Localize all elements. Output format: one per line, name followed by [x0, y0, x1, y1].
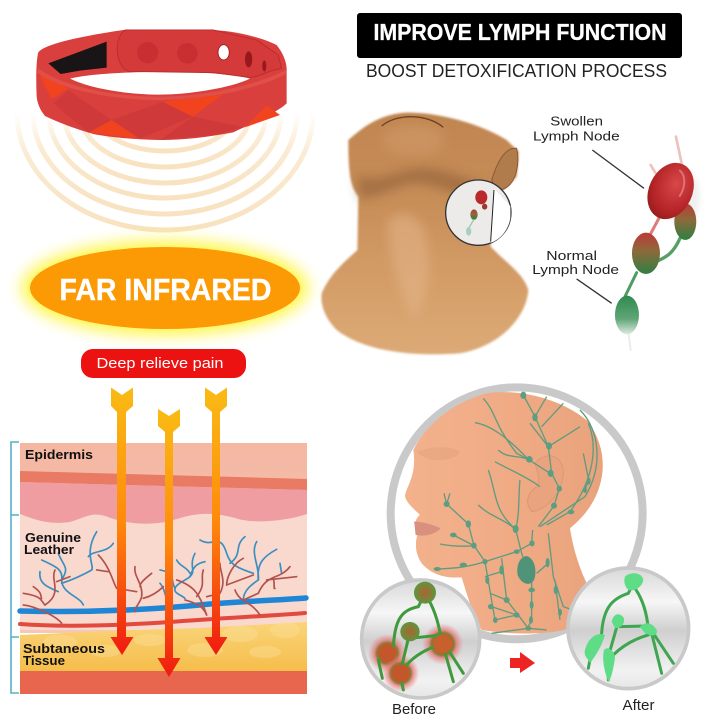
leader line swollen	[592, 150, 644, 188]
chin highlight	[382, 124, 445, 156]
grey ring	[391, 387, 643, 639]
soft shadow	[663, 168, 700, 225]
nodes	[379, 582, 452, 682]
label swollen: Lymph Node	[533, 128, 620, 143]
title banner: IMPROVE LYMPH FUNCTION	[374, 19, 666, 45]
after circle	[568, 568, 689, 689]
inflamed glow	[368, 623, 463, 692]
label subtaneous tissue	[23, 641, 105, 668]
lymph node diagram	[532, 113, 703, 350]
label after: After	[622, 697, 654, 714]
ear	[492, 148, 518, 189]
leader line normal	[577, 279, 612, 303]
front rim shading	[37, 68, 286, 100]
label subtaneous tissue: Tissue	[23, 653, 65, 668]
subtitle: BOOST DETOXIFICATION PROCESS	[366, 61, 667, 81]
chin crease	[382, 117, 443, 127]
label genuine leather: Leather	[24, 542, 74, 557]
blood vessels	[20, 532, 306, 626]
label normal	[532, 248, 619, 277]
magnifier circle	[446, 180, 511, 245]
after network	[588, 587, 673, 680]
jaw shadow	[357, 168, 488, 203]
infrared wave arcs	[17, 113, 313, 230]
arrow right	[204, 388, 228, 655]
bracelet	[36, 30, 287, 140]
pain relief pill	[81, 349, 246, 378]
skin cross-section	[11, 442, 307, 694]
lips	[414, 522, 441, 536]
bracket	[11, 442, 19, 693]
far infrared badge	[22, 241, 308, 335]
title banner	[357, 13, 682, 58]
nodes	[615, 155, 703, 334]
label normal: Normal	[546, 248, 597, 263]
strap with studs	[117, 30, 282, 77]
label genuine leather	[24, 530, 81, 557]
bracelet opening	[70, 72, 250, 95]
lymph nodes	[434, 392, 591, 631]
epidermis layers	[20, 443, 307, 633]
label epidermis: Epidermis	[25, 447, 93, 462]
label genuine leather: Genuine	[25, 530, 81, 545]
before network	[378, 593, 463, 690]
label subtaneous tissue: Subtaneous	[23, 641, 105, 656]
arrow middle	[158, 409, 180, 677]
label normal: Lymph Node	[532, 262, 619, 277]
red arrow before to after	[510, 652, 535, 673]
vessels	[625, 137, 682, 350]
healthy nodes	[585, 573, 657, 682]
pain relief pill: Deep relieve pain	[96, 355, 224, 372]
facets	[39, 75, 280, 139]
label swollen: Swollen	[550, 113, 603, 128]
lymph vessels	[437, 395, 597, 633]
label before: Before	[392, 701, 436, 718]
far infrared badge: FAR INFRARED	[60, 272, 272, 307]
ear	[528, 456, 563, 512]
neck illustration	[321, 113, 528, 354]
velcro strip	[48, 42, 107, 74]
label swollen	[533, 113, 620, 143]
neck highlight	[388, 214, 429, 320]
muscle layer	[20, 671, 307, 694]
face shading	[417, 447, 460, 460]
before circle	[362, 580, 480, 698]
fat layer	[20, 622, 307, 672]
head	[405, 392, 603, 634]
arrow left	[110, 388, 134, 655]
head lymph illustration	[391, 387, 643, 639]
